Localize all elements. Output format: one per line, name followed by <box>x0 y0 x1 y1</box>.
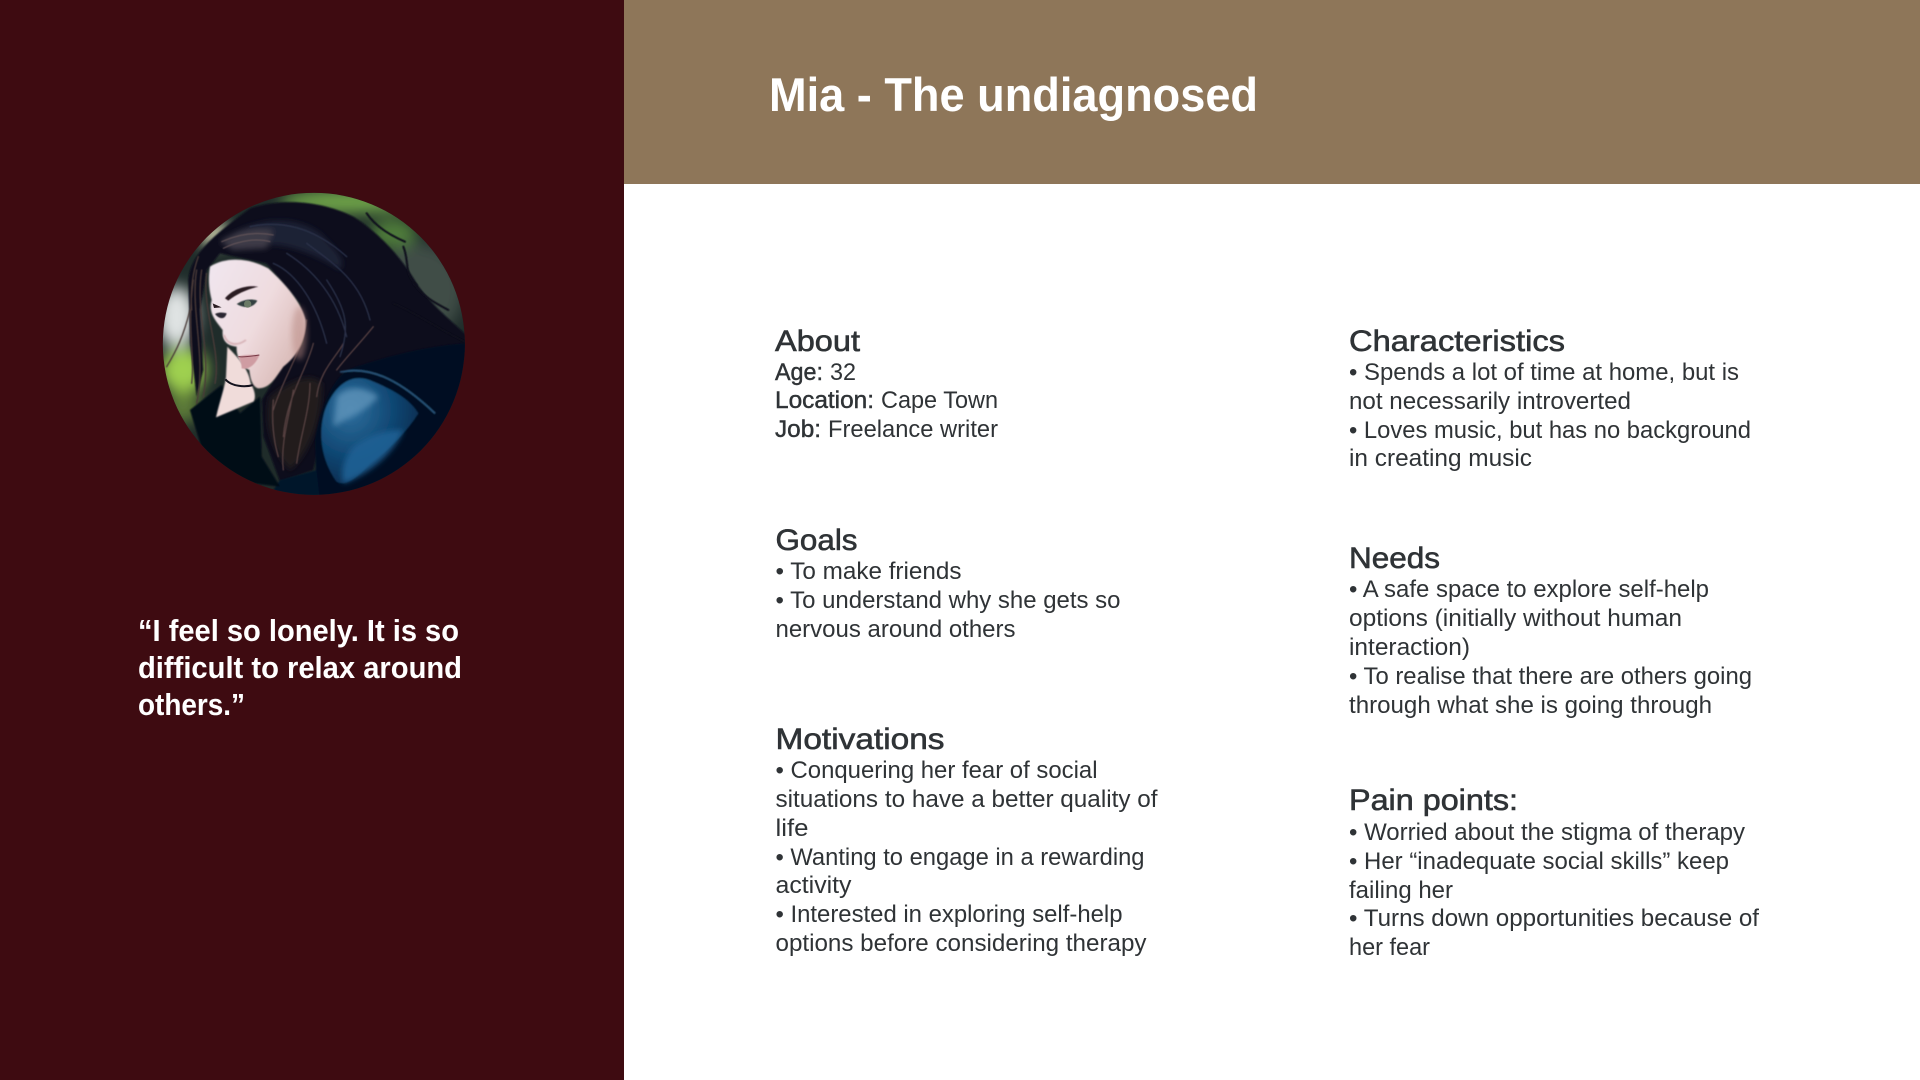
section: about: Job: <box>775 416 821 443</box>
section: needs: • A safe space to explore self-help <box>1349 576 1709 603</box>
section: motivations: life <box>776 815 808 842</box>
section: goals <box>776 524 1120 643</box>
section: needs: • To realise that there are others going <box>1349 663 1752 690</box>
jacket highlights <box>333 389 403 483</box>
section: characteristics: • Loves music, but has no background <box>1349 417 1751 444</box>
bracelet <box>225 379 253 386</box>
section: motivations <box>776 723 1158 957</box>
section: characteristics <box>1349 325 1751 472</box>
section: needs: interaction) <box>1349 634 1470 661</box>
hand and wrist <box>216 347 255 417</box>
section: motivations: • Interested in exploring self-help <box>776 901 1122 928</box>
hair strands <box>167 213 468 470</box>
section: pain points: • Worried about the stigma of therapy <box>1349 819 1745 846</box>
section: about: Cape Town <box>881 387 998 414</box>
section: about <box>775 325 998 443</box>
section: characteristics: • Spends a lot of time at home, but is <box>1349 359 1739 386</box>
hair <box>188 202 468 482</box>
section: needs: through what she is going through <box>1349 692 1712 719</box>
section: pain points: her fear <box>1349 934 1430 961</box>
face <box>209 260 306 388</box>
section: pain points: • Her “inadequate social skills” keep <box>1349 848 1729 875</box>
cheek shadow <box>292 307 307 360</box>
section: characteristics: in creating music <box>1349 445 1532 472</box>
section: characteristics: Characteristics <box>1349 325 1565 358</box>
nose <box>224 335 246 344</box>
section: pain points: • Turns down opportunities because of <box>1349 905 1759 932</box>
section: motivations: options before considering therapy <box>776 930 1146 957</box>
portrait photo <box>157 187 473 503</box>
section: goals: • To understand why she gets so <box>776 587 1120 614</box>
section: motivations: • Wanting to engage in a rewarding <box>776 844 1144 871</box>
section: goals: nervous around others <box>776 616 1016 643</box>
section: about: About <box>775 325 861 358</box>
section: needs: Needs <box>1349 542 1440 575</box>
quote: others.” <box>138 687 245 722</box>
jacket <box>190 343 468 500</box>
section: needs: options (initially without human <box>1349 605 1682 632</box>
lips <box>238 355 259 369</box>
quote <box>138 613 462 722</box>
section: about: Location: <box>775 387 874 414</box>
section: goals: Goals <box>776 524 858 557</box>
title: Mia - The undiagnosed <box>769 68 1258 121</box>
section: motivations: activity <box>776 872 852 899</box>
brows <box>225 286 258 301</box>
section: needs <box>1349 542 1752 719</box>
section: about: 32 <box>830 359 856 386</box>
eyes <box>237 299 257 307</box>
section: goals: • To make friends <box>776 558 962 585</box>
quote: “I feel so lonely. It is so <box>138 613 459 648</box>
section: motivations: situations to have a better quality of <box>776 786 1158 813</box>
section: pain points <box>1349 784 1759 961</box>
section: about: Freelance writer <box>828 416 998 443</box>
section: about: Age: <box>775 359 823 386</box>
quote: difficult to relax around <box>138 650 462 685</box>
section: pain points: failing her <box>1349 877 1453 904</box>
section: pain points: Pain points: <box>1349 784 1518 817</box>
left panel <box>0 0 624 1080</box>
section: motivations: Motivations <box>776 723 944 756</box>
section: characteristics: not necessarily introverted <box>1349 388 1631 415</box>
header band <box>624 0 1920 184</box>
section: motivations: • Conquering her fear of social <box>776 757 1098 784</box>
